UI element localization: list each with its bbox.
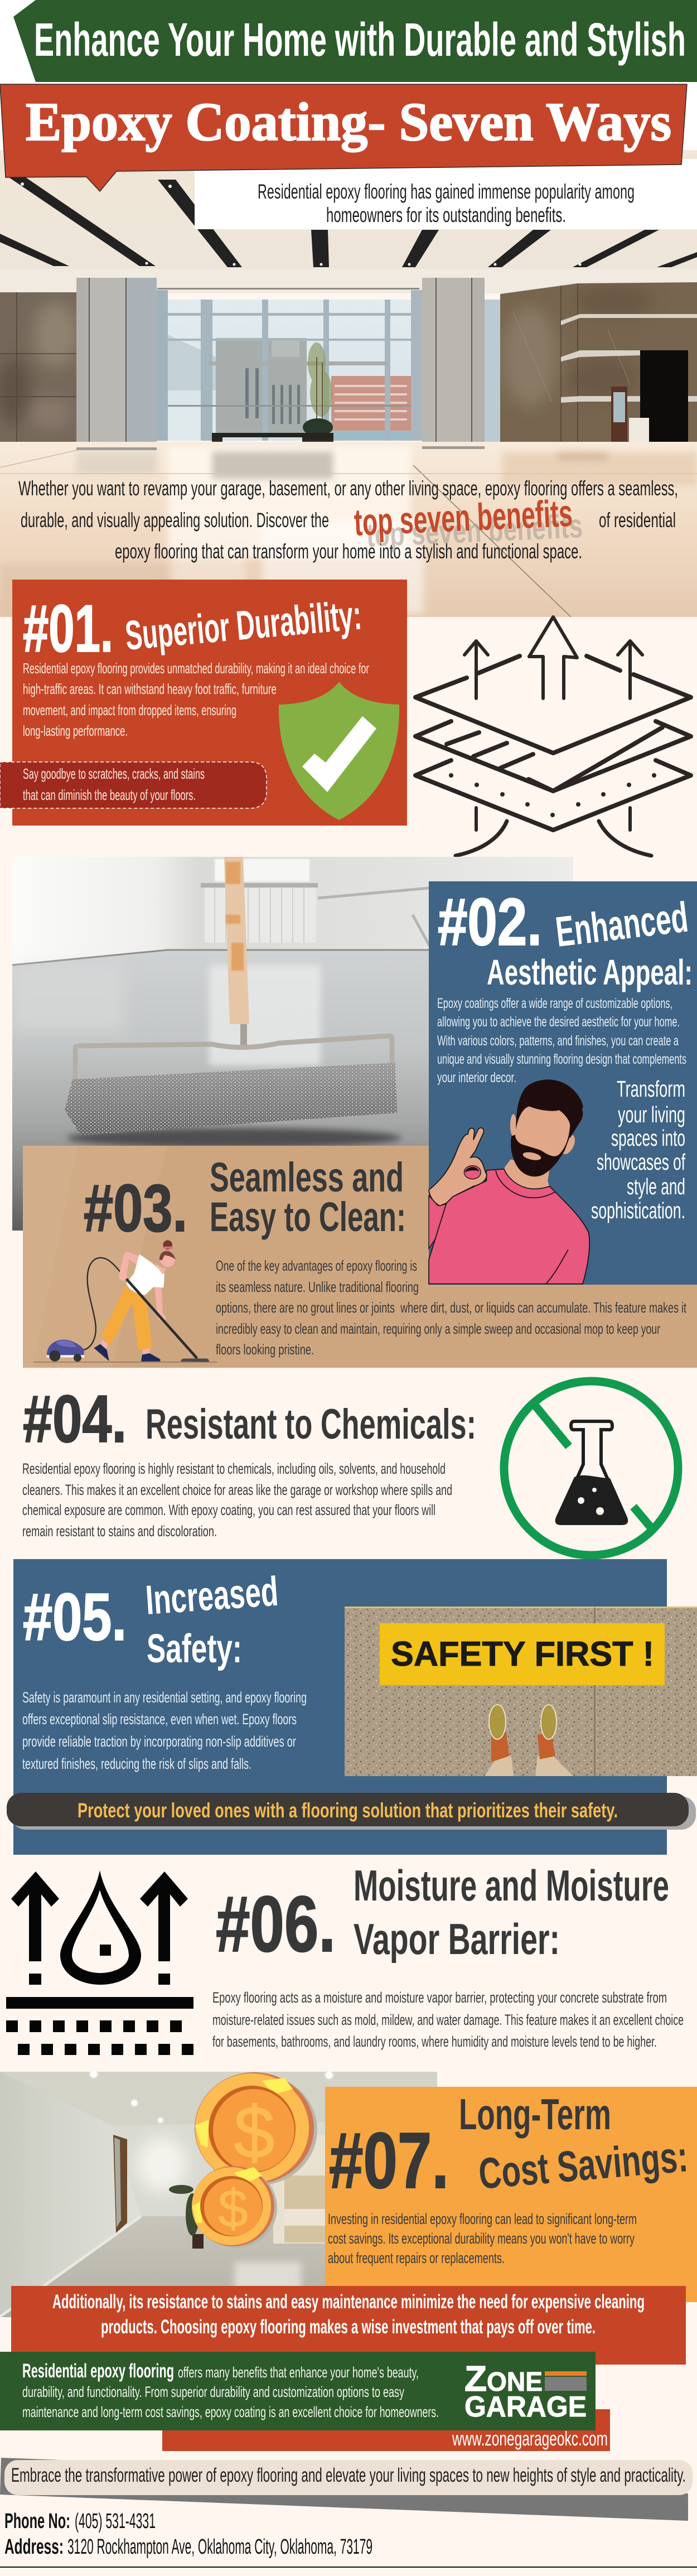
body text: [212, 1989, 684, 2050]
summary text: Residential epoxy flooring: [22, 2360, 174, 2382]
body text: [437, 996, 686, 1086]
address: Address:: [4, 2535, 64, 2559]
heading: long-term cost savings: [459, 2090, 690, 2198]
address: [4, 2535, 372, 2559]
photo: bright hallway with tiled floor: [0, 2070, 437, 2317]
website strip: [162, 2409, 610, 2451]
floor: [0, 442, 697, 617]
roller handle: [224, 857, 249, 1046]
small coin: [192, 2166, 277, 2248]
heading: resistant to chemicals: Resistant to Chemicals:: [146, 1401, 476, 1448]
body text: One of the key advantages of epoxy flooring is: [216, 1257, 417, 1274]
body text: about frequent repairs or replacements.: [328, 2250, 505, 2266]
body text: [328, 2211, 637, 2266]
heading: superior durability: Superior Durability:: [123, 591, 364, 659]
number #07: #07.: [329, 2116, 449, 2205]
highlight: top seven benefits: top seven benefits: [353, 492, 573, 544]
number #05: #05.: [23, 1580, 127, 1654]
heading: increased safety: Safety:: [147, 1627, 242, 1671]
callout: goodbye to scratches: that can diminish the beauty of your floors.: [23, 787, 196, 803]
intro paragraph over the floor: [18, 477, 678, 563]
logo: zone garage: ONE: [487, 2367, 543, 2397]
callout: embrace the transformative power: [0, 2458, 693, 2521]
large coin: $: [234, 2091, 275, 2173]
banner: white intro box: homeowners for its outstanding benefits.: [326, 204, 566, 226]
heading: long-term cost savings: Long-Term: [459, 2090, 611, 2139]
right marble wall: [500, 282, 697, 444]
body text: [22, 1460, 452, 1540]
heading: enhanced aesthetic appeal: [487, 894, 693, 992]
body text: [216, 1257, 687, 1358]
window: [168, 300, 411, 441]
panel: #04 resistant to chemicals: [22, 1381, 678, 1555]
heading: moisture and vapor barrier: Vapor Barrier:: [354, 1914, 560, 1964]
icon: prohibited chemical flask: [504, 1381, 678, 1555]
body text: offers exceptional slip resistance, even when wet. Epoxy floors: [22, 1711, 297, 1728]
body text: chemical exposure are common. With epoxy coating, you can rest assured that your floors will: [22, 1502, 435, 1518]
callout: goodbye to scratches: Say goodbye to scratches, cracks, and stains: [23, 765, 205, 782]
logo: zone garage: [464, 2358, 587, 2423]
heading: seamless and easy to clean: Easy to Clean:: [210, 1194, 406, 1240]
callout: protect your loved ones: [7, 1793, 696, 1830]
small coin: $: [218, 2179, 248, 2239]
summary text: maintenance and long-term cost savings, epoxy coating is an excellent choice for homeowners.: [22, 2404, 439, 2420]
number #01: #01.: [23, 591, 113, 666]
illustration: woman vacuuming: [33, 1240, 217, 1362]
icon: green shield with check: [279, 682, 399, 820]
banner: red title speech bubble: Epoxy Coating- Seven Ways: [26, 92, 671, 152]
large coin: [195, 2072, 317, 2186]
roller frame: [75, 1036, 392, 1085]
heading: increased safety: Increased: [144, 1568, 280, 1623]
intro paragraph over the floor: durable, and visually appealing solution. Discover the: [21, 509, 329, 532]
number #04: #04.: [23, 1382, 127, 1456]
photo: safety first tape and feet: SAFETY FIRST !: [391, 1635, 654, 1673]
body text: Residential epoxy flooring provides unmatched durability, making it an ideal choice for: [23, 660, 369, 677]
website strip: www.zonegarageokc.com: [452, 2427, 608, 2450]
body text: floors looking pristine.: [216, 1341, 314, 1358]
body text: [23, 660, 369, 739]
number #02: #02.: [438, 885, 542, 959]
left marble wall: [0, 292, 76, 442]
logo: zone garage: GARAGE: [464, 2391, 587, 2423]
body text: your interior decor.: [437, 1070, 516, 1086]
body text: high-traffic areas. It can withstand heavy foot traffic, furniture: [23, 681, 277, 697]
tree: [308, 342, 332, 417]
heading: increased safety: [144, 1568, 280, 1671]
ceiling light strips: [0, 177, 697, 267]
body text: textured finishes, reducing the risk of slips and falls.: [22, 1755, 251, 1772]
banner: green title: [13, 0, 697, 82]
body text: [22, 1689, 307, 1772]
heading: moisture and vapor barrier: [354, 1861, 669, 1964]
heading: seamless and easy to clean: [210, 1154, 406, 1240]
panel: green summary with logo: [0, 2352, 596, 2430]
photo: spiked roller on wet epoxy floor: [12, 857, 573, 1231]
heading: seamless and easy to clean: Seamless and: [210, 1154, 404, 1200]
summary text: durability, and functionality. From superior durability and customization options to easy: [22, 2384, 404, 2400]
panel: additional savings band: [11, 2286, 686, 2365]
panel: #02 enhanced aesthetic appeal: [429, 881, 697, 1285]
body text: cleaners. This makes it an excellent choice for areas like the garage or workshop where spills and: [22, 1482, 452, 1498]
body text: remain resistant to stains and discoloration.: [22, 1523, 217, 1540]
banner: white intro box: [195, 159, 697, 229]
contact details: [4, 2510, 372, 2559]
phone number: Phone No:: [4, 2510, 70, 2533]
panel: #06 moisture and vapor barrier: [6, 1861, 684, 2055]
roller drum: [65, 1063, 397, 1135]
body text: movement, and impact from dropped items, ensuring: [23, 702, 236, 718]
shadow text: top seven benefits: top seven benefits: [366, 507, 583, 554]
callout: goodbye to scratches: [0, 762, 267, 808]
icon: gold dollar coins: [192, 2072, 317, 2248]
summary text: [22, 2360, 439, 2420]
body text: Safety is paramount in any residential setting, and epoxy flooring: [22, 1689, 307, 1706]
body text: provide reliable traction by incorporating non-slip additives or: [22, 1733, 296, 1750]
panel: #03 seamless and easy to clean: [23, 1146, 697, 1368]
body text: Residential epoxy flooring is highly resistant to chemicals, including oils, solvents, and household: [22, 1460, 446, 1477]
illustration: bearded man making OK sign: [429, 1079, 589, 1284]
address: 3120 Rockhampton Ave, Oklahoma City, Oklahoma, 73179: [67, 2535, 372, 2559]
photo: bright lobby with glossy floor: [0, 150, 697, 617]
number #03: #03.: [84, 1171, 187, 1246]
photo: safety first tape and feet: [345, 1607, 697, 1776]
icon: layered floor with rising arrows: [415, 617, 691, 856]
icon: moisture barrier: [6, 1870, 193, 2055]
panel: #05 increased safety: [7, 1559, 697, 1855]
bench and planter: [222, 433, 302, 437]
number #06: #06.: [216, 1880, 336, 1969]
summary text: offers many benefits that enhance your home's beauty,: [178, 2364, 419, 2381]
logo: zone garage: Z: [464, 2358, 487, 2399]
body text: its seamless nature. Unlike traditional flooring: [216, 1279, 419, 1295]
columns: [90, 278, 125, 442]
body text: long-lasting performance.: [23, 722, 128, 739]
banner: red title speech bubble: [0, 84, 687, 191]
right wall light strips, door and kiosk: [561, 314, 697, 403]
panel: #07 long-term cost savings: [325, 2087, 697, 2302]
panel: #01 superior durability: [0, 580, 407, 826]
callout: transform your living spaces: [591, 1076, 685, 1223]
phone number: (405) 531-4331: [75, 2510, 156, 2533]
